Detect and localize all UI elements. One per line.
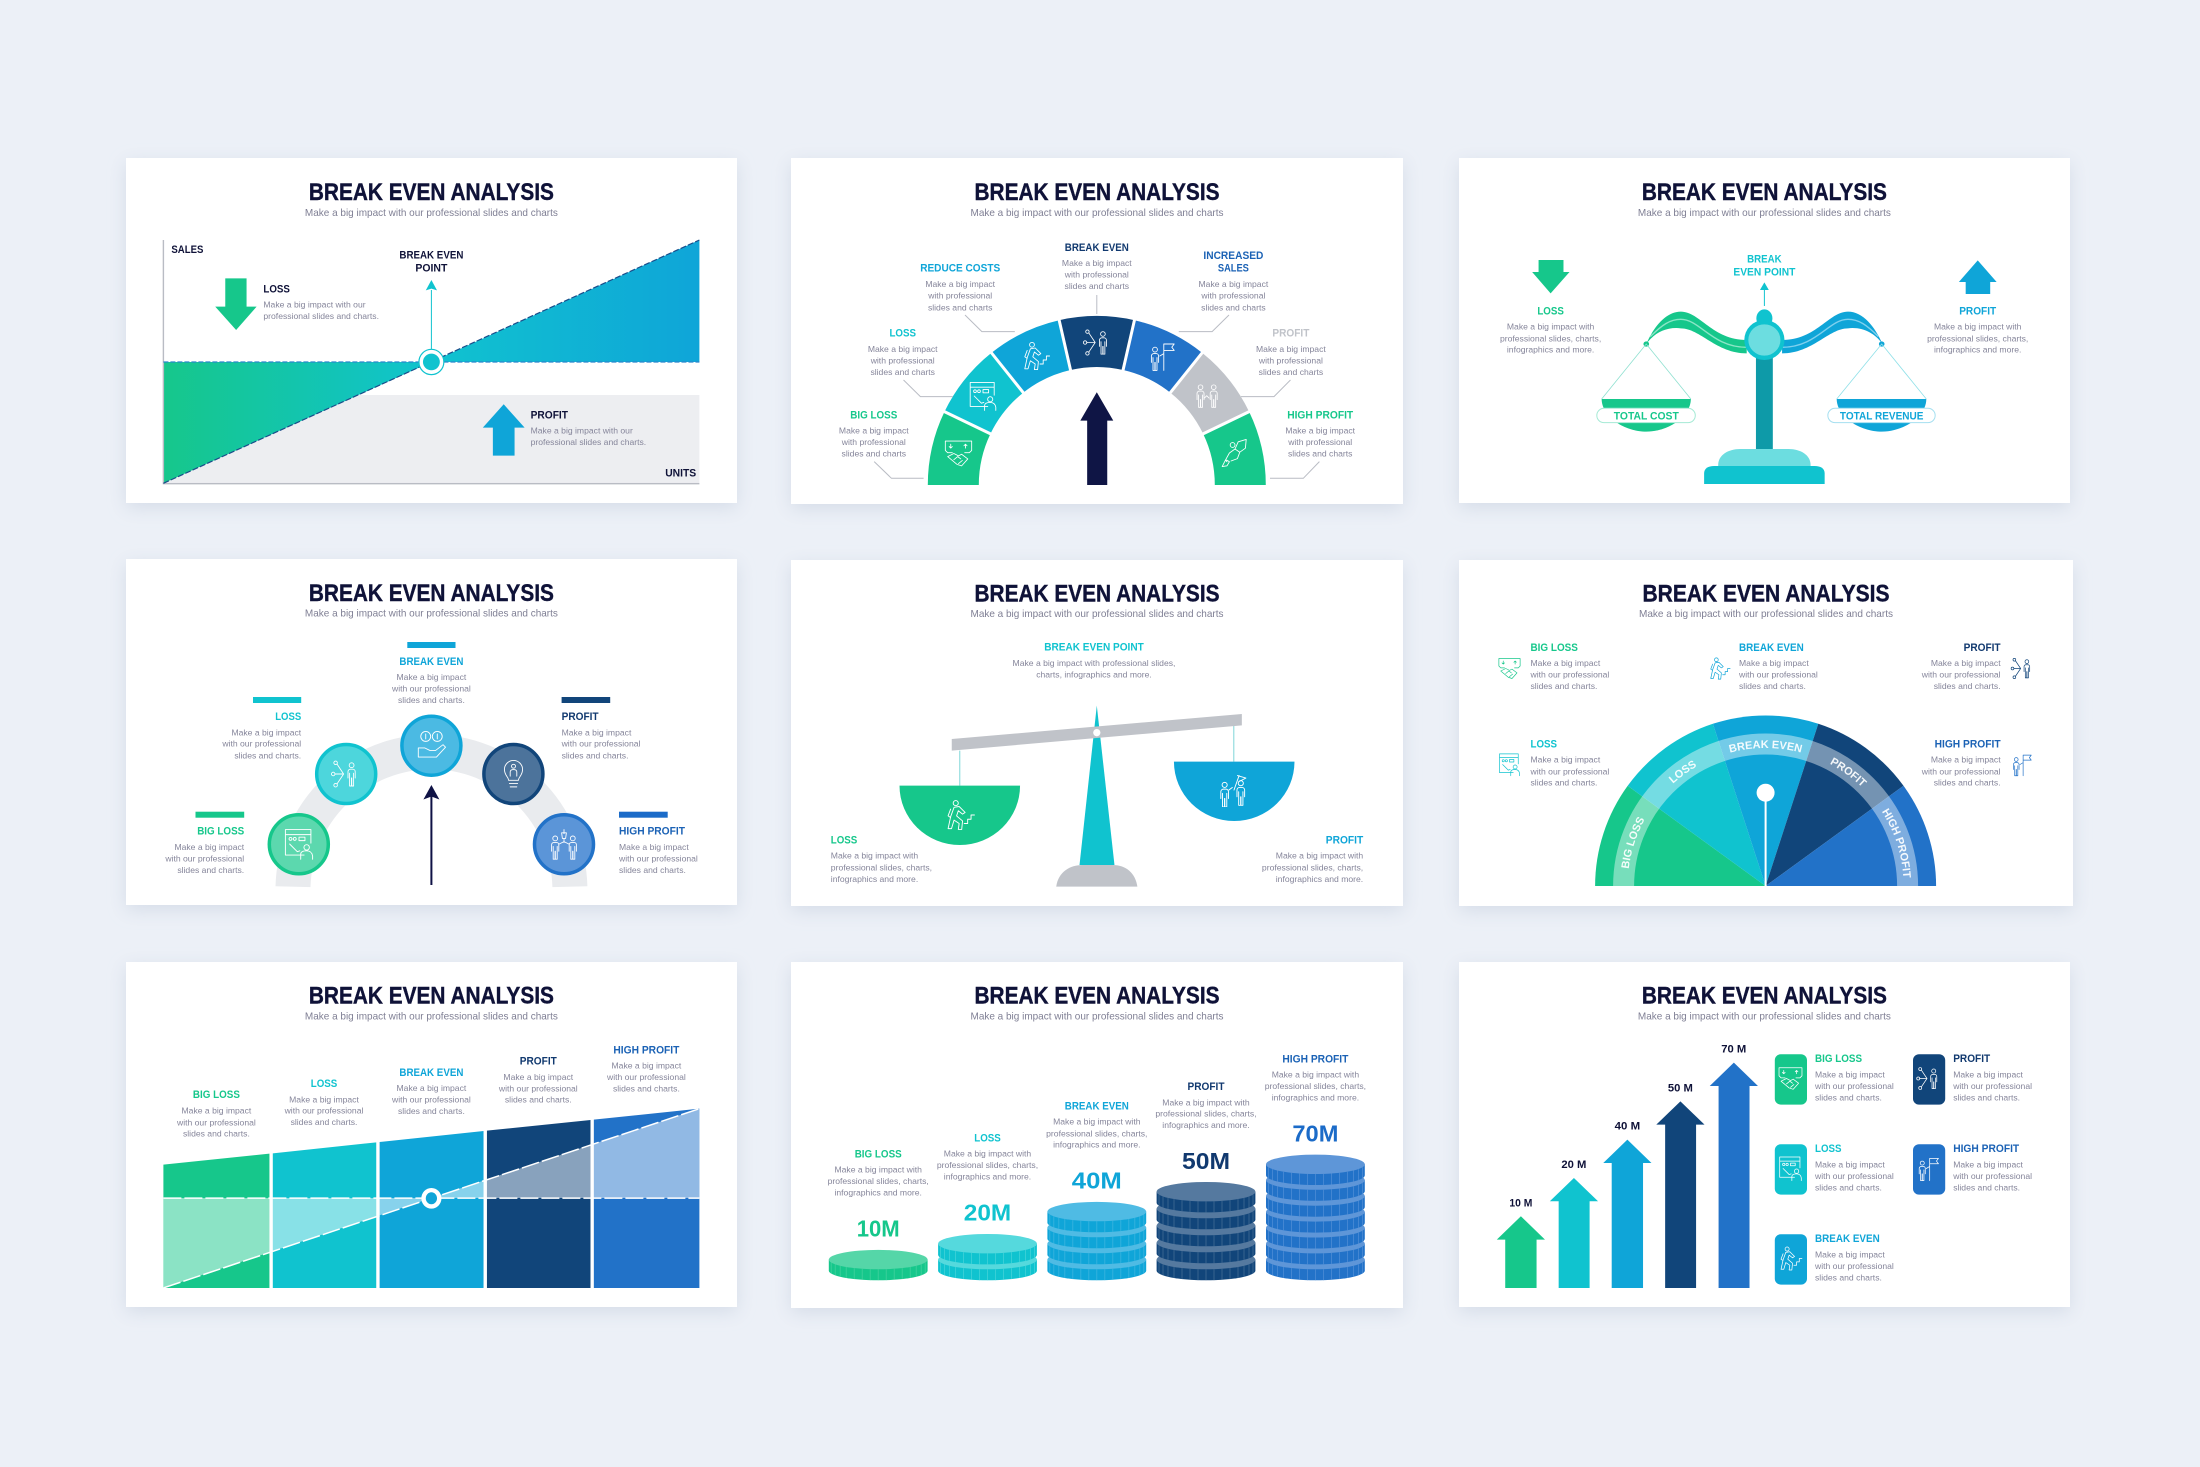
units axis label: UNITS: [665, 468, 696, 480]
break even text: with our professional: [391, 684, 471, 694]
sales axis label: SALES: [171, 244, 203, 256]
big loss text: with our professional: [164, 853, 244, 863]
high profit text: HIGH PROFIT: [1953, 1143, 2019, 1155]
high profit text: HIGH PROFIT: [1935, 739, 2001, 751]
profit text: PROFIT: [1188, 1081, 1225, 1093]
high profit text: HIGH PROFIT: [613, 1044, 680, 1056]
arrow value labels: [1509, 1044, 1746, 1210]
profit text: Make a big impact: [503, 1072, 574, 1082]
high profit text: with professional: [1287, 437, 1352, 447]
profit text: infographics and more.: [1934, 345, 2021, 355]
profit text: infographics and more.: [1276, 874, 1363, 884]
subtitle: Make a big impact with our professional slides and charts: [305, 1012, 558, 1023]
break even point text: Make a big impact with professional slides,: [1013, 658, 1175, 668]
profit text: with our professional: [1921, 670, 2001, 680]
break even text: Make a big impact: [397, 672, 467, 682]
high profit text: Make a big impact: [619, 842, 689, 852]
profit text: slides and charts.: [562, 750, 628, 760]
subtitle: Make a big impact with our professional slides and charts: [305, 208, 558, 219]
break even chart: [163, 240, 699, 484]
high profit text: slides and charts.: [1934, 778, 2001, 788]
break even text: Make a big impact: [1815, 1249, 1885, 1259]
subtitle: Make a big impact with our professional slides and charts: [1638, 1012, 1891, 1023]
increased sales text: INCREASED: [1203, 250, 1263, 262]
big loss text: BIG LOSS: [1530, 642, 1578, 654]
break even text: [1814, 1233, 1894, 1282]
break even point label: POINT: [415, 262, 448, 274]
big loss text: with professional: [841, 437, 906, 447]
break even text: professional slides, charts,: [1046, 1128, 1147, 1138]
loss text: slides and charts.: [1815, 1182, 1882, 1192]
panel: slide 2 semicircle gauge: [791, 158, 1403, 504]
reduce costs text: REDUCE COSTS: [920, 263, 1000, 275]
profit text: Make a big impact: [1931, 658, 2001, 668]
circle: profit: [484, 744, 543, 804]
profit text: [1921, 642, 2001, 691]
profit text: [531, 409, 646, 447]
big loss text: BIG LOSS: [197, 826, 244, 838]
loss text: [263, 284, 379, 321]
break even point text: [1013, 642, 1175, 680]
profit text: with our professional: [498, 1083, 578, 1093]
big loss text: with our professional: [1530, 670, 1609, 680]
profit text: PROFIT: [1272, 328, 1310, 340]
big loss text: [839, 409, 909, 459]
loss text: LOSS: [275, 711, 301, 723]
big loss text: slides and charts.: [1815, 1092, 1882, 1102]
panel: slide 8 coin stacks: [791, 962, 1403, 1308]
card icon: break even: [1775, 1234, 1807, 1285]
panel: slide 5 tilted scale: [791, 560, 1403, 906]
loss text: with our professional: [284, 1106, 363, 1116]
profit text: infographics and more.: [1162, 1120, 1250, 1130]
loss text: LOSS: [1815, 1143, 1842, 1155]
high profit text: professional slides, charts,: [1265, 1081, 1366, 1091]
high profit text: HIGH PROFIT: [1282, 1053, 1349, 1065]
increased sales text: Make a big impact: [1199, 279, 1269, 289]
break even text: infographics and more.: [1053, 1140, 1141, 1150]
arrow value labels: 70 M: [1721, 1044, 1746, 1056]
big loss text: BIG LOSS: [850, 409, 897, 421]
loss text: with our professional: [1530, 766, 1609, 776]
high profit text: [1265, 1053, 1366, 1103]
loss text: [831, 835, 932, 884]
center arrow: [1080, 392, 1113, 485]
high profit text: HIGH PROFIT: [619, 826, 685, 838]
high profit text: with our professional: [606, 1072, 686, 1082]
profit text: PROFIT: [1326, 835, 1363, 847]
tilted scale: [900, 706, 1294, 887]
break even point label: BREAK EVEN: [399, 249, 463, 261]
loss text: LOSS: [831, 835, 857, 847]
profit text: [561, 711, 641, 760]
high profit text: Make a big impact: [612, 1060, 682, 1070]
profit text: professional slides, charts,: [1155, 1109, 1257, 1119]
loss text: [937, 1132, 1038, 1182]
high profit text: with our professional: [1952, 1171, 2032, 1181]
big loss text: with our professional: [176, 1117, 256, 1127]
title: BREAK EVEN ANALYSIS: [309, 983, 554, 1010]
subtitle: Make a big impact with our professional slides and charts: [970, 609, 1224, 620]
increased sales text: slides and charts: [1201, 302, 1266, 312]
loss text: [284, 1078, 363, 1127]
loss text: LOSS: [263, 284, 290, 296]
break even point label: [1733, 253, 1796, 278]
value: 40M: 40M: [1072, 1168, 1122, 1194]
profit text: [1155, 1081, 1257, 1130]
subtitle: Make a big impact with our professional slides and charts: [970, 1012, 1224, 1023]
profit text: [1927, 306, 2028, 355]
accent bars: [196, 642, 668, 818]
icon: loss arrow: [215, 278, 257, 330]
big loss text: slides and charts: [842, 449, 906, 459]
circle: break even: [402, 716, 461, 775]
high profit text: [618, 826, 698, 875]
big loss text: Make a big impact: [1530, 658, 1601, 668]
break even text: Make a big impact with: [1053, 1117, 1141, 1127]
high profit text: [606, 1044, 686, 1093]
loss text: LOSS: [311, 1078, 337, 1090]
title: BREAK EVEN ANALYSIS: [309, 179, 554, 206]
break even text: Make a big impact: [397, 1083, 467, 1093]
profit text: PROFIT: [562, 711, 599, 723]
gauge icons: [945, 330, 1246, 467]
panel: slide 7 column chart: [126, 962, 737, 1307]
value: 70M: 70M: [1292, 1120, 1338, 1146]
loss text: Make a big impact: [1530, 755, 1601, 765]
circle: loss: [317, 744, 376, 804]
loss text: Make a big impact: [289, 1094, 359, 1104]
increased sales text: SALES: [1218, 263, 1249, 275]
coin stack: 70M: [1266, 1155, 1365, 1280]
profit text: Make a big impact: [562, 727, 632, 737]
big loss text: BIG LOSS: [193, 1089, 240, 1101]
break even text: BREAK EVEN: [1065, 1100, 1129, 1112]
loss text: LOSS: [1530, 739, 1557, 751]
break even text: with our professional: [1814, 1261, 1894, 1271]
break even text: BREAK EVEN: [399, 1067, 463, 1079]
profit text: [1952, 1053, 2032, 1102]
reduce costs text: with professional: [927, 291, 992, 301]
big loss text: slides and charts.: [1530, 681, 1597, 691]
break even text: slides and charts.: [398, 1106, 465, 1116]
arrow value labels: 20 M: [1561, 1159, 1586, 1171]
break even text: [391, 656, 471, 705]
break even text: BREAK EVEN: [1065, 242, 1129, 254]
break even text: slides and charts.: [1739, 681, 1806, 691]
loss text: with our professional: [221, 739, 301, 749]
profit text: slides and charts.: [505, 1095, 572, 1105]
icon: break even: [1711, 658, 1730, 679]
profit text: Make a big impact with: [1276, 851, 1363, 861]
break even text: slides and charts.: [1815, 1272, 1882, 1282]
break even text: BREAK EVEN: [399, 656, 463, 668]
circle: high profit: [534, 815, 594, 874]
loss text: slides and charts: [870, 367, 935, 377]
break even text: [1738, 642, 1818, 691]
big loss text: Make a big impact: [182, 1106, 252, 1116]
increased sales text: with professional: [1200, 291, 1265, 301]
rising arrows: [1497, 1063, 1758, 1288]
arrow value labels: 40 M: [1615, 1121, 1640, 1133]
loss text: slides and charts.: [1530, 778, 1597, 788]
high profit text: HIGH PROFIT: [1287, 409, 1353, 421]
high profit text: Make a big impact: [1953, 1159, 2024, 1169]
loss text: infographics and more.: [944, 1172, 1031, 1182]
break even text: slides and charts.: [398, 695, 465, 705]
break even text: [1046, 1100, 1147, 1150]
high profit text: [1921, 739, 2001, 788]
loss text: slides and charts.: [291, 1117, 357, 1127]
title: BREAK EVEN ANALYSIS: [974, 581, 1220, 608]
high profit text: infographics and more.: [1272, 1093, 1359, 1103]
break even text: BREAK EVEN: [1815, 1233, 1880, 1245]
reduce costs text: [920, 263, 1000, 312]
loss text: slides and charts.: [234, 750, 301, 760]
value: 10M: 10M: [857, 1215, 900, 1241]
card icon: loss: [1775, 1144, 1807, 1195]
loss text: Make a big impact: [868, 344, 938, 354]
coin stack: 40M: [1047, 1202, 1146, 1280]
profit text: [498, 1056, 578, 1105]
card icon: big loss: [1775, 1054, 1807, 1105]
big loss text: [164, 826, 245, 875]
profit text: Make a big impact with: [1934, 322, 2022, 332]
break even text: Make a big impact: [1062, 258, 1132, 268]
break even point text: charts, infographics and more.: [1036, 670, 1152, 680]
high profit text: [1952, 1143, 2032, 1192]
profit text: PROFIT: [1964, 642, 2001, 654]
high profit text: Make a big impact with: [1272, 1070, 1359, 1080]
icon: climber: [948, 801, 974, 829]
high profit text: slides and charts: [1288, 449, 1352, 459]
icon: high profit: [2013, 755, 2031, 776]
icon: loss: [1500, 754, 1520, 776]
increased sales text: [1199, 250, 1269, 312]
big loss text: [1814, 1053, 1894, 1102]
profit text: slides and charts: [1259, 367, 1323, 377]
coin stack: 20M: [938, 1234, 1037, 1280]
big loss text: BIG LOSS: [855, 1148, 902, 1160]
loss text: infographics and more.: [1507, 345, 1594, 355]
value: 50M: 50M: [1182, 1148, 1230, 1174]
reduce costs text: Make a big impact: [925, 279, 996, 289]
profit text: PROFIT: [1953, 1053, 1990, 1065]
loss text: LOSS: [889, 328, 916, 340]
loss text: infographics and more.: [831, 874, 918, 884]
coin stack: 10M: [829, 1250, 928, 1280]
icon: profit: [2011, 658, 2030, 679]
big loss text: professional slides, charts,: [828, 1176, 929, 1186]
profit text: with our professional: [561, 739, 641, 749]
profit text: professional slides and charts.: [531, 437, 646, 447]
loss text: Make a big impact with: [944, 1149, 1031, 1159]
big loss text: [828, 1148, 929, 1197]
profit text: Make a big impact with: [1162, 1097, 1250, 1107]
center arrow: [423, 785, 439, 885]
gauge segments: [942, 317, 1252, 485]
subtitle: Make a big impact with our professional slides and charts: [970, 208, 1224, 219]
high profit text: [1285, 409, 1356, 459]
subtitle: Make a big impact with our professional slides and charts: [305, 609, 558, 620]
loss text: professional slides and charts.: [263, 311, 379, 321]
profit text: [1262, 835, 1363, 884]
profit text: with our professional: [1952, 1081, 2032, 1091]
big loss text: [176, 1089, 256, 1139]
title: BREAK EVEN ANALYSIS: [1642, 179, 1887, 206]
card icon: high profit: [1913, 1144, 1945, 1195]
break even text: [391, 1067, 471, 1116]
loss text: Make a big impact: [231, 727, 302, 737]
profit text: professional slides, charts,: [1927, 333, 2028, 343]
panel: slide 4 arch of circles: [126, 559, 737, 905]
subtitle: Make a big impact with our professional slides and charts: [1638, 208, 1891, 219]
profit text: PROFIT: [531, 409, 568, 421]
icon: team with flag: [1221, 776, 1246, 807]
break even text: BREAK EVEN: [1739, 642, 1804, 654]
title: BREAK EVEN ANALYSIS: [1642, 581, 1890, 608]
break even point label: EVEN POINT: [1733, 266, 1796, 278]
five columns with break even lines: [163, 1109, 699, 1289]
high profit text: with our professional: [618, 853, 698, 863]
loss text: [221, 711, 302, 760]
circle: big loss: [269, 815, 328, 874]
loss text: with our professional: [1814, 1171, 1894, 1181]
pie wedges: [1595, 715, 1936, 886]
profit text: PROFIT: [1959, 306, 1996, 318]
loss text: LOSS: [974, 1132, 1001, 1144]
needle: [1757, 784, 1775, 886]
big loss text: [1530, 642, 1609, 691]
high profit text: slides and charts.: [613, 1083, 680, 1093]
value: 20M: 20M: [964, 1199, 1011, 1225]
loss text: professional slides, charts,: [831, 862, 932, 872]
reduce costs text: slides and charts: [928, 302, 992, 312]
total cost label: TOTAL COST: [1614, 410, 1679, 422]
title: BREAK EVEN ANALYSIS: [309, 580, 554, 607]
break even point label: [399, 249, 463, 274]
big loss text: BIG LOSS: [1815, 1053, 1862, 1065]
high profit text: slides and charts.: [1953, 1182, 2020, 1192]
profit text: [1256, 328, 1326, 377]
break even text: with our professional: [1738, 670, 1818, 680]
big loss text: slides and charts.: [183, 1129, 250, 1139]
loss text: Make a big impact with: [1507, 322, 1595, 332]
card icon: profit: [1913, 1054, 1945, 1105]
loss text: with professional: [870, 355, 935, 365]
loss text: [1814, 1143, 1894, 1192]
profit text: Make a big impact: [1256, 344, 1326, 354]
profit text: Make a big impact with our: [531, 426, 633, 436]
arrow value labels: 10 M: [1509, 1198, 1532, 1210]
big loss text: Make a big impact with: [834, 1164, 922, 1174]
high profit text: Make a big impact: [1285, 426, 1356, 436]
profit text: professional slides, charts,: [1262, 862, 1363, 872]
panel: slide 3 balance scale: [1459, 158, 2070, 503]
loss text: [1530, 739, 1609, 788]
big loss text: with our professional: [1814, 1081, 1894, 1091]
profit text: with professional: [1258, 355, 1323, 365]
panel: slide 1 break even chart: [126, 158, 737, 503]
loss text: professional slides, charts,: [937, 1160, 1038, 1170]
icon: big loss: [1499, 658, 1520, 678]
break even text: with our professional: [391, 1095, 471, 1105]
balance scale: [1597, 282, 1935, 484]
title: BREAK EVEN ANALYSIS: [974, 179, 1220, 206]
panel: slide 6 pie gauge: [1456, 560, 2076, 914]
big loss text: slides and charts.: [177, 865, 244, 875]
high profit text: with our professional: [1921, 766, 2001, 776]
profit text: Make a big impact: [1953, 1069, 2024, 1079]
loss text: [868, 328, 938, 377]
profit text: slides and charts.: [1953, 1092, 2020, 1102]
break even point label: BREAK: [1747, 253, 1782, 265]
gray arch: [293, 752, 570, 887]
break even point text: BREAK EVEN POINT: [1044, 642, 1144, 654]
loss text: [1500, 306, 1601, 355]
subtitle: Make a big impact with our professional slides and charts: [1639, 609, 1893, 620]
icon: profit arrow: [483, 404, 525, 456]
break even text: [1062, 242, 1132, 291]
big loss text: infographics and more.: [834, 1187, 922, 1197]
leader lines: [874, 295, 1319, 478]
icon: profit arrow: [1959, 260, 1997, 294]
high profit text: Make a big impact: [1931, 755, 2001, 765]
break even text: with professional: [1064, 270, 1129, 280]
title: BREAK EVEN ANALYSIS: [974, 983, 1220, 1010]
profit text: slides and charts.: [1934, 681, 2001, 691]
coin stack: 50M: [1157, 1182, 1255, 1280]
loss text: Make a big impact with our: [263, 300, 366, 310]
loss text: professional slides, charts,: [1500, 333, 1601, 343]
icon: loss arrow: [1532, 260, 1570, 293]
big loss text: Make a big impact: [1815, 1069, 1885, 1079]
big loss text: Make a big impact: [839, 426, 909, 436]
loss text: LOSS: [1537, 306, 1564, 318]
break even text: Make a big impact: [1739, 658, 1809, 668]
total revenue label: TOTAL REVENUE: [1840, 410, 1923, 422]
high profit text: slides and charts.: [619, 865, 686, 875]
panel: slide 9 rising arrows: [1459, 962, 2070, 1307]
profit text: PROFIT: [520, 1056, 557, 1068]
curved wedge labels: BIG LOSS LOSS BREAK EVEN PROFIT HIGH PROFIT: [1621, 740, 1911, 878]
loss text: Make a big impact: [1815, 1159, 1885, 1169]
loss text: Make a big impact with: [831, 851, 918, 861]
big loss text: Make a big impact: [174, 842, 245, 852]
arrow value labels: 50 M: [1668, 1082, 1693, 1094]
break even text: slides and charts: [1065, 281, 1129, 291]
title: BREAK EVEN ANALYSIS: [1642, 983, 1887, 1010]
